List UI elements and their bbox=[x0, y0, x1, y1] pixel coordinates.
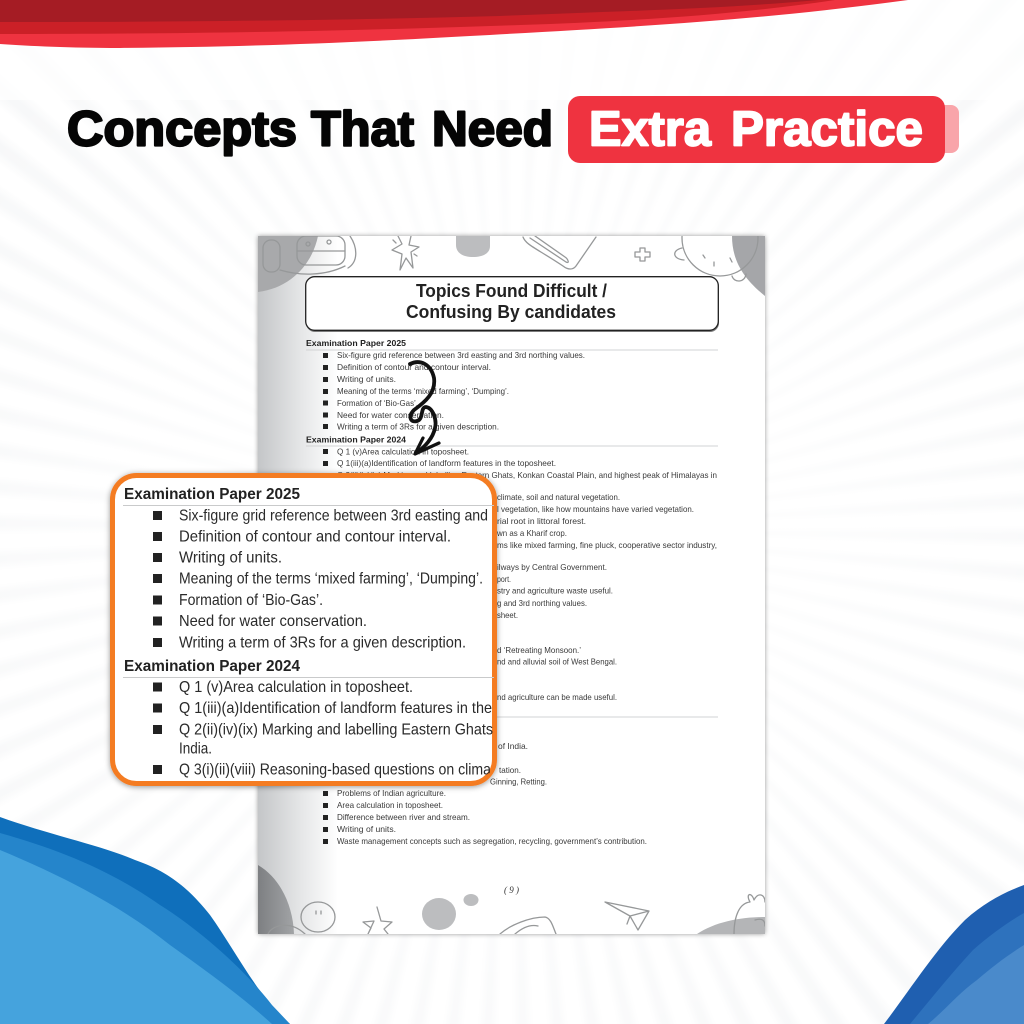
page text: Examination Paper 2024: stry and agriculture waste useful. bbox=[497, 586, 613, 596]
page text: Examination Paper 2024: rial root in littoral forest. bbox=[497, 516, 586, 526]
page text: Examination Paper 2024: port. bbox=[497, 574, 511, 584]
callout section: Examination Paper 2025: Writing a term of 3Rs for a given description. bbox=[179, 634, 466, 652]
page sheet bbox=[258, 236, 765, 934]
page text: Examination Paper 2025: Examination Paper 2025 bbox=[306, 338, 406, 348]
page text: Examination Paper 2024: Difference between river and stream. bbox=[337, 812, 470, 822]
page text: Examination Paper 2024: Writing of units. bbox=[337, 824, 396, 834]
callout section: Examination Paper 2024: Examination Paper 2024 bbox=[124, 658, 300, 675]
page text: Examination Paper 2024: g and 3rd northing values. bbox=[497, 598, 587, 608]
zoomed callout bbox=[112, 476, 495, 784]
page text: Examination Paper 2025: Six-figure grid reference between 3rd easting and 3rd northing values. bbox=[337, 350, 585, 360]
callout section: Examination Paper 2024: India. bbox=[179, 740, 212, 758]
callout section: Examination Paper 2025: Need for water conservation. bbox=[179, 613, 367, 630]
highlight pill bbox=[568, 96, 945, 163]
page text: Examination Paper 2024: Waste management concepts such as segregation, recycling, government’s contribution. bbox=[337, 836, 647, 846]
callout content bbox=[123, 486, 495, 778]
page text: Examination Paper 2024: Area calculation in toposheet. bbox=[337, 800, 443, 810]
page text: Examination Paper 2024: tation. bbox=[499, 765, 521, 775]
page text: Examination Paper 2024: sheet. bbox=[497, 610, 518, 620]
page text: Examination Paper 2024: wn as a Kharif crop. bbox=[496, 528, 567, 538]
page text: Examination Paper 2024: Examination Paper 2024 bbox=[306, 434, 406, 444]
page text: Examination Paper 2024: ilways by Central Government. bbox=[497, 562, 607, 572]
page title box bbox=[306, 277, 719, 332]
page text: Examination Paper 2025: Meaning of the terms ‘mixed farming’, ‘Dumping’. bbox=[337, 386, 509, 396]
callout section: Examination Paper 2024: Q 1 (v)Area calculation in toposheet. bbox=[179, 679, 413, 696]
left gutter shading bbox=[258, 236, 338, 934]
curly arrow bbox=[410, 362, 439, 454]
highlight text: Extra bbox=[589, 102, 712, 156]
callout section: Examination Paper 2024: Q 2(ii)(iv)(ix) Marking and labelling Eastern Ghats bbox=[179, 722, 493, 738]
page text: Examination Paper 2024: ms like mixed farming, fine pluck, cooperative sector industry, bbox=[497, 540, 717, 550]
callout section: Examination Paper 2025: Meaning of the terms ‘mixed farming’, ‘Dumping’. bbox=[179, 570, 483, 588]
page text: Examination Paper 2024: l vegetation, like how mountains have varied vegetation. bbox=[497, 504, 694, 514]
callout section: Examination Paper 2024: Q 1(iii)(a)Identification of landform features in the bbox=[179, 700, 492, 717]
page text: Examination Paper 2025: Formation of ‘Bio-Gas’. bbox=[337, 398, 418, 408]
bottom-left blue wave bbox=[0, 817, 290, 1024]
callout section: Examination Paper 2024 bbox=[123, 658, 495, 778]
page title box: Confusing By candidates bbox=[406, 302, 616, 322]
heading text: That bbox=[311, 102, 414, 156]
page text: Examination Paper 2025: Definition of contour and contour interval. bbox=[337, 362, 491, 372]
bottom-right blue wave bbox=[884, 885, 1024, 1024]
heading text: Need bbox=[432, 102, 553, 156]
callout section: Examination Paper 2025: Six-figure grid reference between 3rd easting and bbox=[179, 508, 488, 524]
callout section: Examination Paper 2025: Examination Paper 2025 bbox=[124, 486, 300, 503]
page text: Examination Paper 2024: Problems of Indian agriculture. bbox=[337, 788, 446, 798]
book page bbox=[258, 200, 765, 934]
highlight text: Practice bbox=[731, 102, 923, 156]
page text: Examination Paper 2025: Need for water conservation. bbox=[337, 410, 444, 420]
page text: Examination Paper 2024: Q 1(iii)(a)Identification of landform features in the toposheet. bbox=[337, 458, 556, 468]
top red swoosh bbox=[0, 0, 908, 48]
callout frame bbox=[112, 476, 494, 784]
page corner blobs and doodles bbox=[258, 200, 765, 934]
page text: Examination Paper 2025: Writing a term of 3Rs for a given description. bbox=[337, 422, 499, 432]
page number: ( 9 ) bbox=[504, 885, 519, 895]
page text: Examination Paper 2024 bbox=[306, 434, 718, 846]
heading text: Concepts bbox=[67, 102, 297, 156]
highlight pill shadow bbox=[920, 105, 959, 153]
callout section: Examination Paper 2025 bbox=[123, 486, 495, 652]
page text: Examination Paper 2024: d ‘Retreating Monsoon.’ bbox=[497, 645, 581, 655]
page text: Examination Paper 2024: climate, soil and natural vegetation. bbox=[497, 492, 620, 502]
heading bbox=[67, 96, 959, 163]
page title box: Topics Found Difficult / bbox=[416, 281, 607, 301]
page text: Examination Paper 2024: of India. bbox=[498, 741, 528, 751]
page text: Examination Paper 2025: Writing of units. bbox=[337, 374, 396, 384]
page text: Examination Paper 2025 bbox=[306, 338, 718, 432]
callout section: Examination Paper 2025: Writing of units. bbox=[179, 550, 282, 566]
callout section: Examination Paper 2024: Q 3(i)(ii)(viii) Reasoning-based questions on clima bbox=[179, 762, 491, 778]
page text: Examination Paper 2024: Q 1 (v)Area calculation in toposheet. bbox=[337, 446, 469, 456]
page text: Examination Paper 2024: Ginning, Retting. bbox=[490, 776, 547, 786]
page text: Examination Paper 2024: nd agriculture can be made useful. bbox=[497, 692, 617, 702]
callout section: Examination Paper 2025: Definition of contour and contour interval. bbox=[179, 528, 451, 546]
page text: Examination Paper 2024: nd and alluvial soil of West Bengal. bbox=[497, 656, 617, 666]
page text: Examination Paper 2024: Q 2(ii)(iv)(ix) Marking and labelling Eastern Ghats, Konkan Coastal Plain, and highest peak of Himalayas in bbox=[337, 470, 717, 480]
callout section: Examination Paper 2025: Formation of ‘Bio-Gas’. bbox=[179, 592, 323, 609]
